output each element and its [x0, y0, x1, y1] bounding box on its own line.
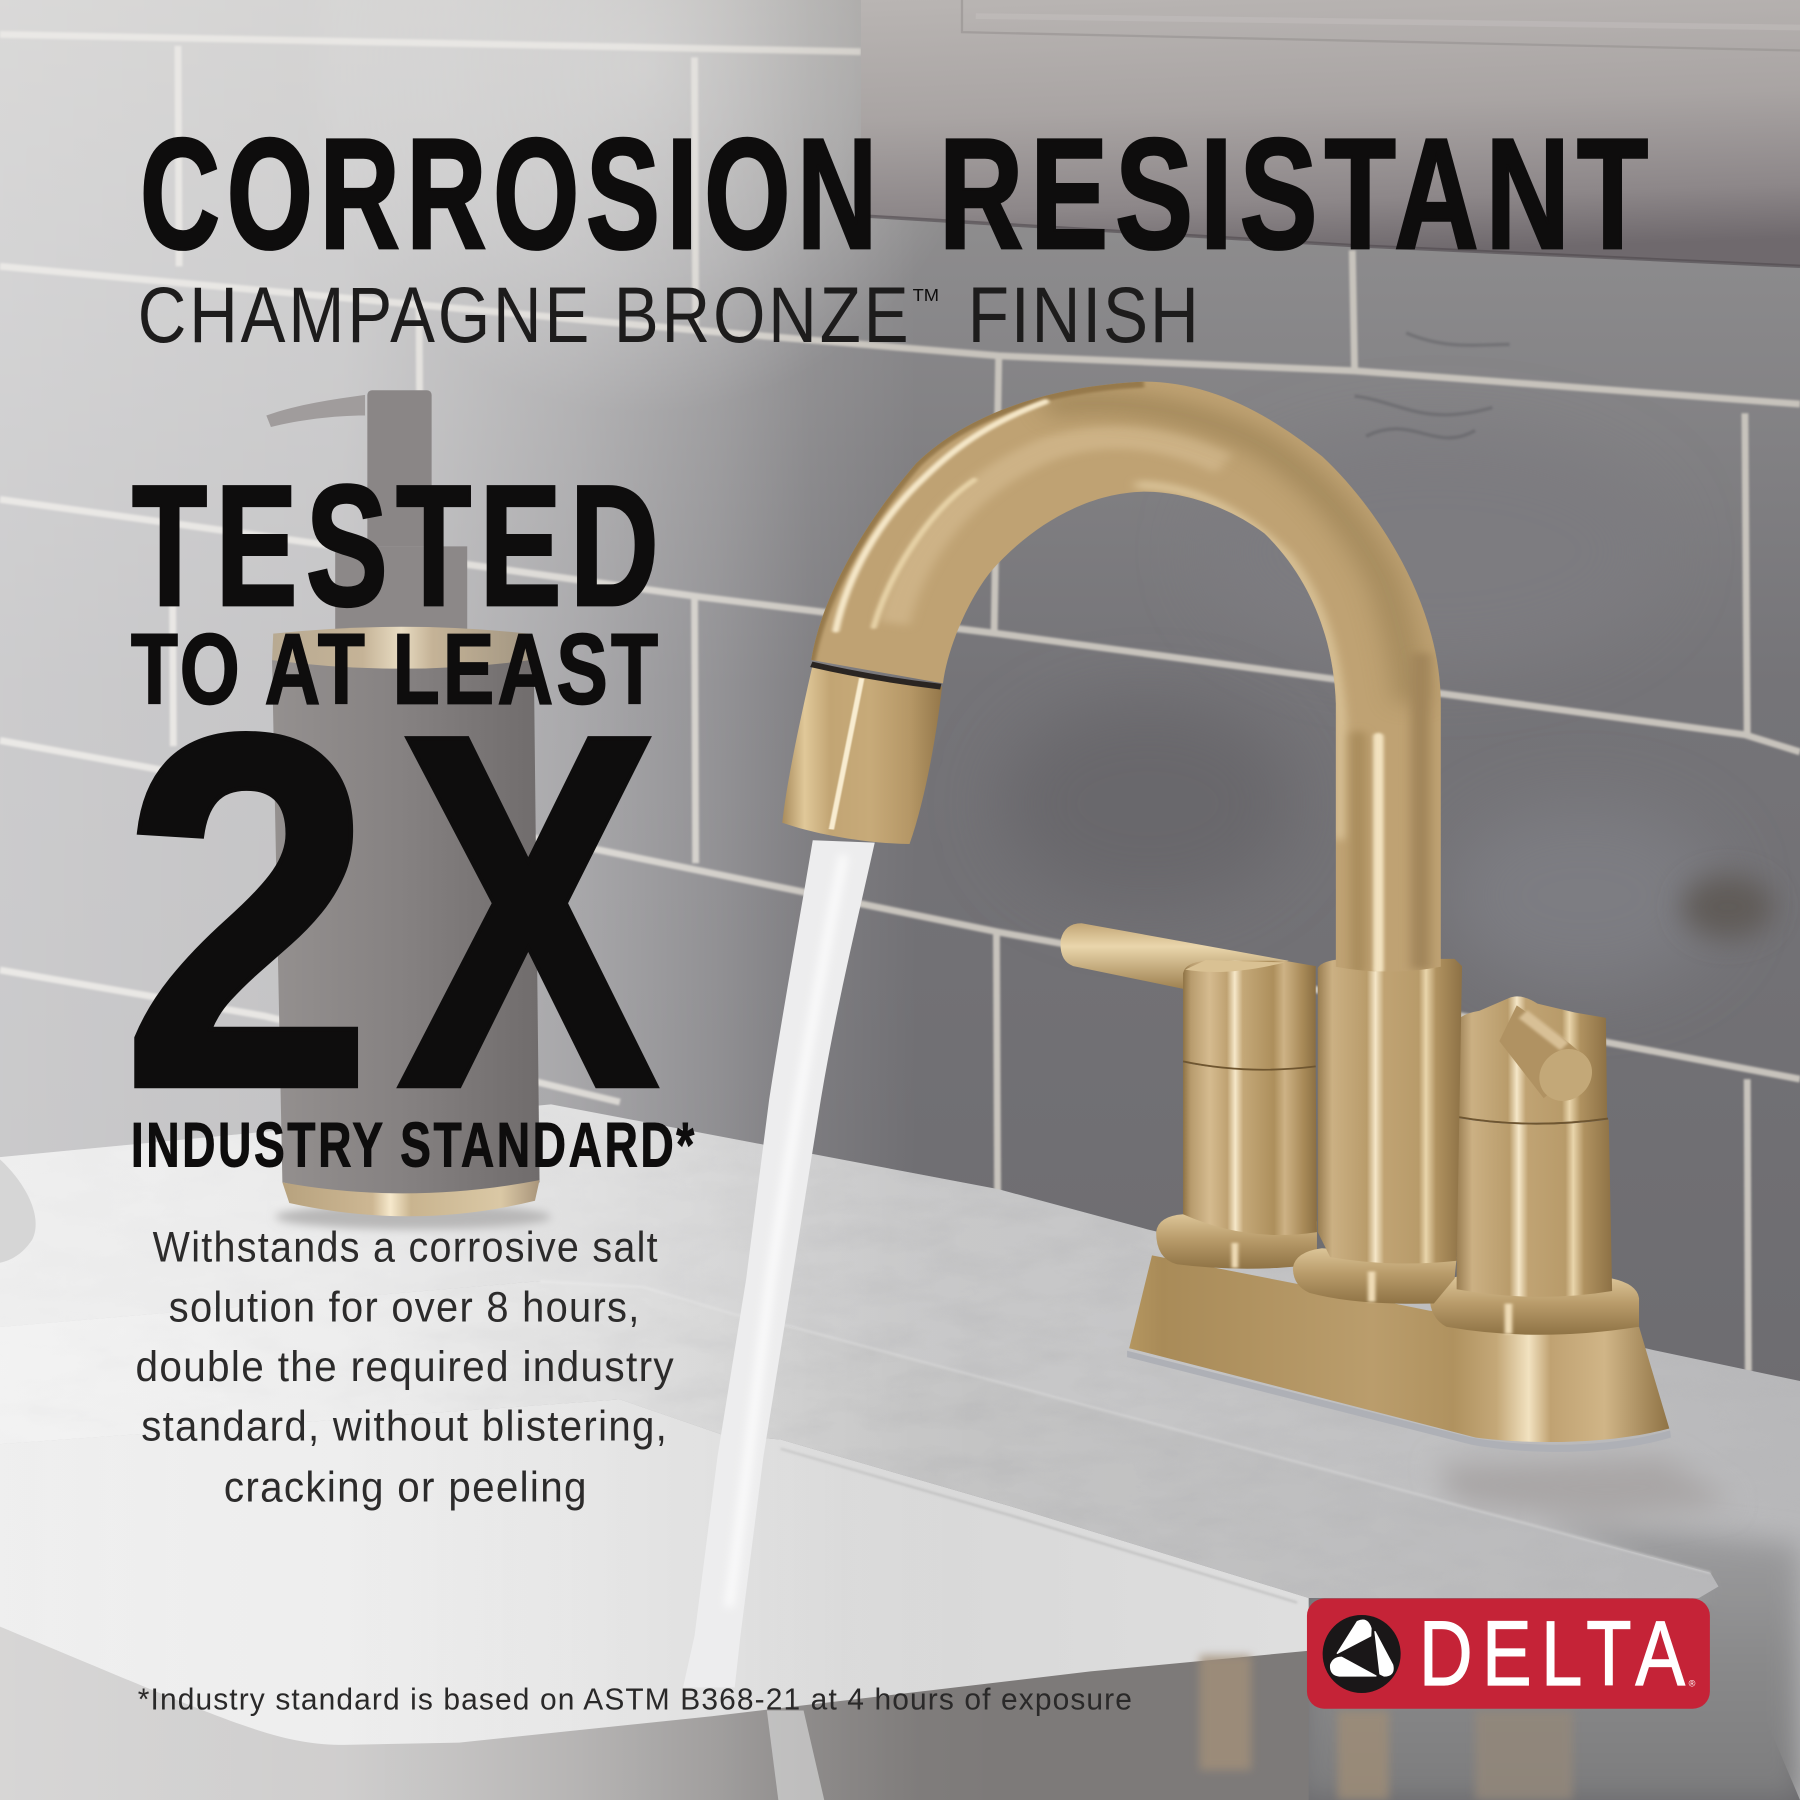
right handle body: [1457, 1118, 1612, 1297]
logo mark: [1323, 1615, 1401, 1693]
marble counter top: [0, 1091, 1800, 1800]
base plate: [1129, 1255, 1669, 1442]
nozzle black ring: [811, 664, 941, 687]
center column base disk: [1293, 1248, 1457, 1304]
spout arc: [809, 382, 1441, 972]
soap dispenser: [266, 390, 551, 1229]
white fade over upper middle: [0, 0, 1033, 517]
big stat: 2X: X: [396, 630, 662, 1194]
body copy: solution for over 8 hours,: [169, 1283, 641, 1330]
footnote: *Industry standard is based on ASTM B368-21 at 4 hours of exposure: [138, 1681, 1133, 1716]
faucet spout: [782, 382, 1441, 972]
sink rim: [0, 1274, 1800, 1607]
title: [140, 107, 1655, 282]
left handle lever: [1061, 923, 1289, 989]
body copy: [135, 1224, 675, 1511]
spout nozzle: [782, 665, 942, 844]
lower sink reflection: [0, 1607, 1309, 1800]
body copy: cracking or peeling: [224, 1464, 588, 1511]
heading: tested: TESTED: [132, 450, 667, 642]
counter reflection under faucet: [1435, 1458, 1733, 1521]
heading: industry standard: INDUSTRY STANDARD*: [131, 1110, 697, 1180]
center column: [1318, 959, 1462, 1264]
left handle body: [1183, 1062, 1317, 1235]
body copy: double the required industry: [135, 1343, 675, 1390]
heading: to at least: TO AT LEAST: [131, 615, 661, 726]
logo wordmark: DELTA: [1419, 1603, 1694, 1705]
right handle cap: [1457, 996, 1607, 1123]
subtitle: TM: [913, 285, 939, 305]
registered mark: ®: [1689, 1678, 1696, 1688]
Delta logo: [1307, 1599, 1710, 1709]
lower right counter shadow: [1297, 1515, 1800, 1800]
big stat: 2X: [121, 630, 662, 1194]
small white soap dish at far left: [0, 1159, 36, 1263]
white fade over the sink: [0, 1104, 999, 1800]
faucet lower assembly: [1061, 923, 1671, 1452]
left cap seam: [1183, 1061, 1316, 1070]
sink bowl: [0, 1399, 1309, 1745]
right cap seam: [1457, 1117, 1608, 1124]
base plate gasket: [1127, 1351, 1671, 1452]
big stat: 2X: 2: [121, 630, 374, 1194]
bowl shading under the rim: [781, 1449, 1297, 1603]
left handle cap: [1183, 960, 1316, 1069]
body copy: standard, without blistering,: [141, 1403, 668, 1450]
body copy: Withstands a corrosive salt: [153, 1224, 659, 1271]
right handle lever knob: [1499, 1005, 1600, 1107]
subtitle: FINISH: [968, 270, 1201, 359]
window sill panel, top right: [861, 0, 1800, 266]
title: CORROSION: [140, 107, 884, 282]
subtitle: CHAMPAGNE BRONZE: [138, 270, 911, 359]
right handle base disk: [1430, 1277, 1639, 1335]
water stream: [683, 840, 875, 1800]
left handle base disk: [1156, 1214, 1317, 1269]
faucet reflection in the basin: [1200, 1655, 1573, 1800]
